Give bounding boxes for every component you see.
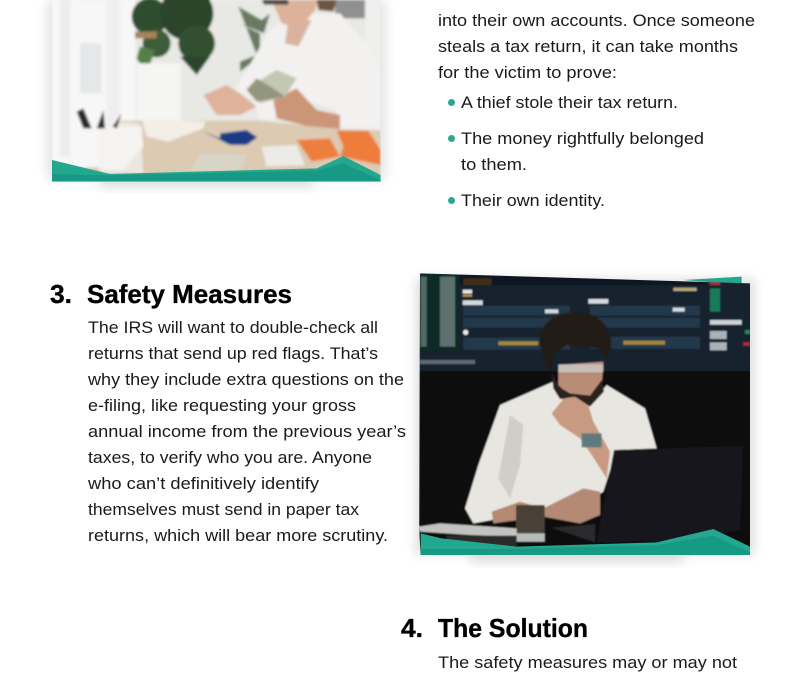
section 3 body text: why they include extra questions on the [87, 370, 404, 389]
section 2 text continuation [438, 11, 755, 82]
section 3 body text [87, 318, 406, 545]
bullet list: A thief stole their tax return. [461, 93, 678, 112]
bullet list: Their own identity. [461, 191, 605, 210]
section 3 body text: who can’t definitively identify [87, 474, 320, 493]
heading: 3. Safety Measures: Safety Measures [87, 279, 292, 309]
section 3 body text: themselves must send in paper tax [88, 500, 360, 519]
teal swoosh [52, 156, 381, 182]
section 2 text continuation: for the victim to prove: [438, 63, 617, 82]
section 3 body text: taxes, to verify who you are. Anyone [88, 448, 372, 467]
bullet list [448, 93, 704, 210]
section 3 body text: returns, which will bear more scrutiny. [88, 526, 388, 545]
section 3 body text: returns that send up red flags. That’s [88, 344, 378, 363]
heading: 4. The Solution: 4. [401, 613, 423, 643]
teal swoosh [421, 529, 750, 555]
photo: woman counting money at a desk [47, 0, 386, 188]
bullet list: to them. [461, 155, 527, 174]
section 3 body text: annual income from the previous year’s [88, 422, 406, 441]
section 2 text continuation: steals a tax return, it can take months [438, 37, 738, 56]
photo: man studying laptop before trading screen [415, 272, 755, 563]
section 4 body text: The safety measures may or may not [438, 653, 737, 672]
heading: 4. The Solution: The Solution [438, 613, 588, 643]
section 3 body text: e-filing, like requesting your gross [88, 396, 356, 415]
section 2 text continuation: into their own accounts. Once someone [438, 11, 755, 30]
heading: 3. Safety Measures: 3. [50, 279, 72, 309]
bullet list: The money rightfully belonged [461, 129, 704, 148]
section 3 body text: The IRS will want to double-check all [88, 318, 378, 337]
